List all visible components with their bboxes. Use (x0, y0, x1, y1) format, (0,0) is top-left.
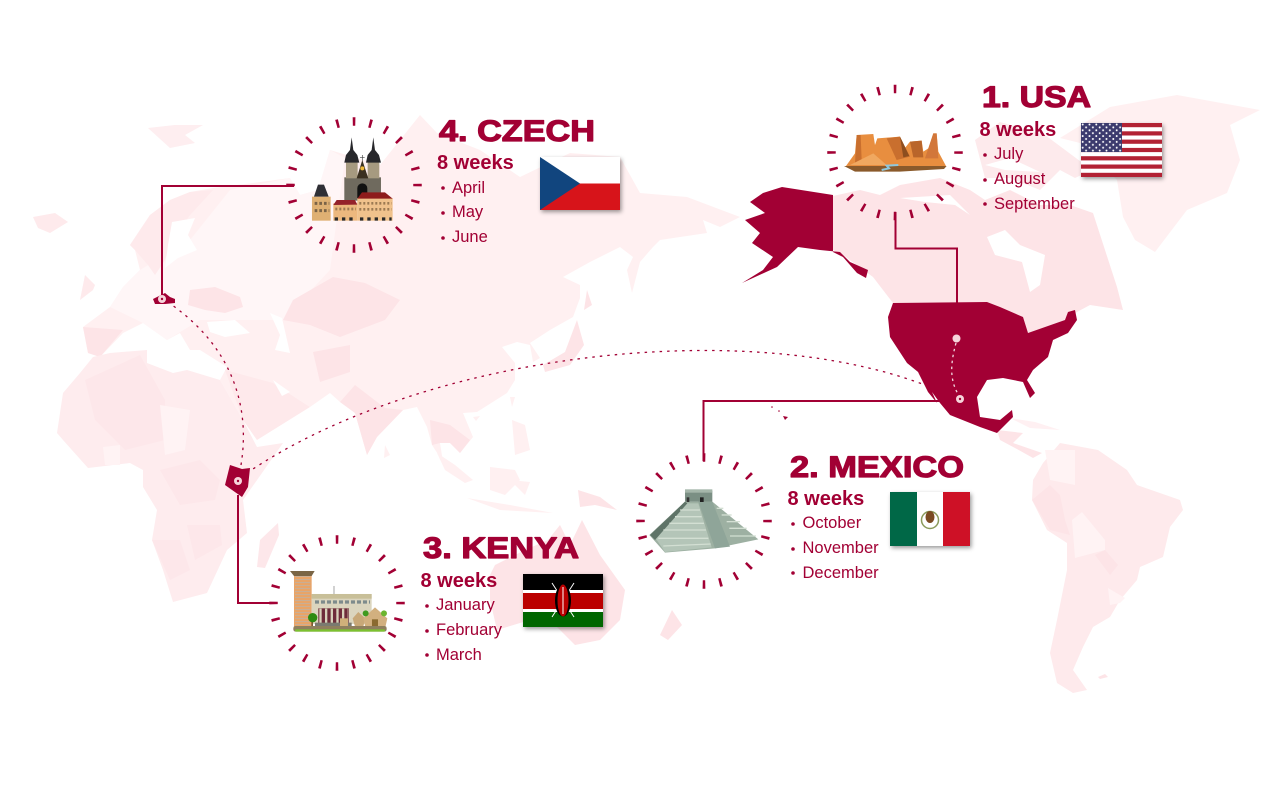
panel: 1. USA (832, 81, 1162, 216)
duration: 8 weeks (980, 119, 1056, 141)
location markers (158, 295, 964, 485)
tick ring: Mexico (640, 458, 768, 584)
map: Australia and New Zealand (490, 520, 682, 645)
title: 3. KENYA (423, 532, 579, 565)
flag: Mexico (890, 492, 970, 546)
route: USA to Mexico (952, 343, 958, 394)
icon: Nairobi buildings (290, 571, 387, 632)
month list (791, 514, 879, 582)
connector: Czech Republic (162, 186, 294, 295)
month list: July (994, 145, 1024, 163)
month list: April (452, 179, 485, 197)
map: Central and South America (997, 430, 1183, 693)
flag: USA (1081, 123, 1162, 177)
month list: September (994, 195, 1075, 213)
world map background (33, 95, 1260, 693)
map: Africa (57, 350, 283, 602)
month list: August (994, 170, 1046, 188)
title: 1. USA (982, 81, 1091, 114)
highlighted country: contiguous USA and Mexico (888, 302, 1077, 433)
panel: 3. KENYA (274, 532, 603, 666)
map: Greenland (1060, 95, 1260, 252)
tick ring: USA (832, 89, 958, 216)
month list: December (802, 564, 879, 582)
flag: Kenya (523, 574, 603, 627)
month list (441, 179, 488, 246)
connector: Kenya (238, 495, 277, 603)
connector: USA (896, 212, 957, 303)
highlighted country: Hawaii (771, 406, 788, 420)
route: Mexico to Kenya (247, 350, 925, 473)
tick ring: Kenya (274, 540, 400, 666)
flag: Czech Republic (540, 157, 620, 210)
map: islands of Europe and Asia (33, 125, 617, 513)
month list (983, 145, 1075, 213)
panel: 4. CZECH (290, 115, 620, 248)
panel: 2. MEXICO (640, 451, 970, 584)
icon: Prague church and houses (312, 137, 393, 221)
icon: pyramid (649, 489, 758, 553)
month list (425, 596, 503, 664)
title: 4. CZECH (439, 115, 595, 148)
month list: January (436, 596, 495, 614)
month list: June (452, 228, 488, 246)
duration: 8 weeks (437, 152, 514, 174)
month list: March (436, 646, 482, 664)
map: Caribbean (1010, 418, 1060, 430)
month list: November (802, 539, 879, 557)
map: Eurasia (83, 115, 740, 462)
highlighted country: Kenya (225, 465, 250, 497)
title: 2. MEXICO (790, 451, 964, 484)
month list: October (802, 514, 862, 532)
map: Canada (833, 122, 1123, 333)
icon: canyon (844, 133, 947, 172)
duration: 8 weeks (788, 488, 864, 510)
highlighted country: Czech Republic (153, 293, 175, 304)
route: Kenya to Czech Republic (172, 305, 243, 465)
month list: May (452, 203, 484, 221)
duration: 8 weeks (420, 570, 497, 592)
month list: February (436, 621, 503, 639)
connector: Mexico (704, 401, 940, 461)
tick ring: Czech Republic (290, 122, 418, 248)
highlighted country: Alaska (742, 187, 868, 283)
